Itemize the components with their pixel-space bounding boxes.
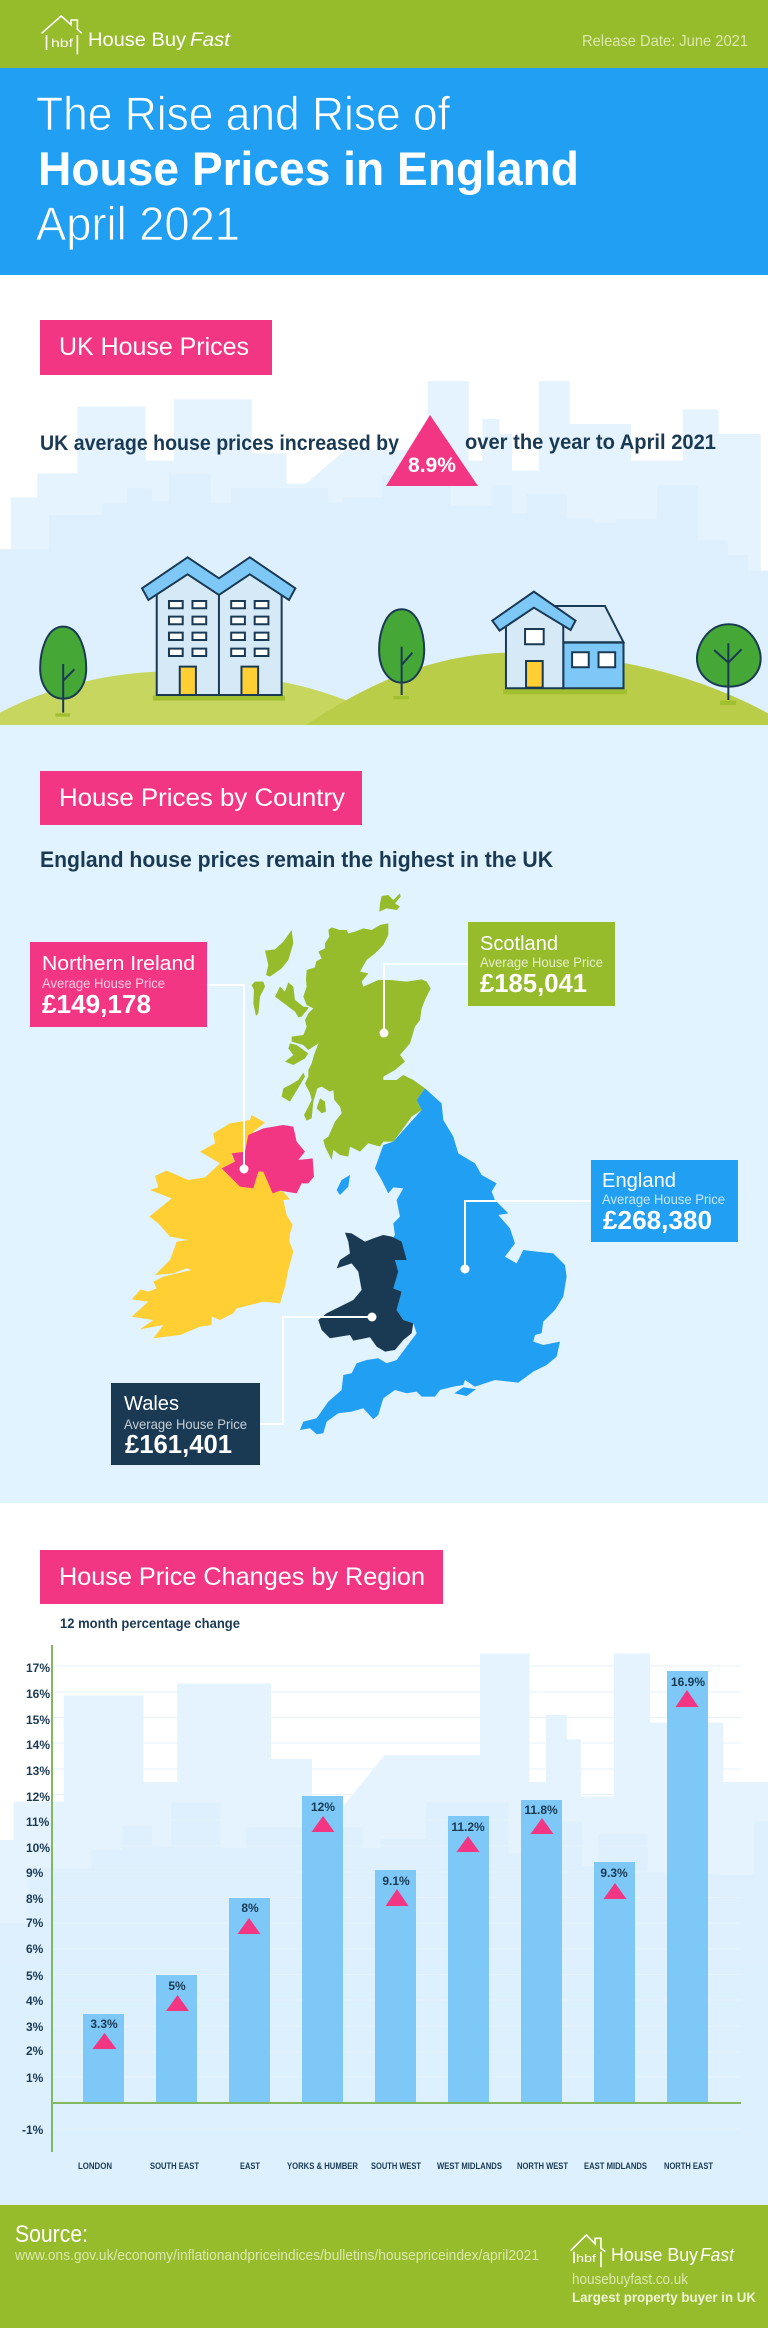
source	[14, 2221, 539, 2264]
y axis labels: 14%	[26, 1738, 50, 1752]
y axis labels: 17%	[26, 1661, 50, 1675]
y axis labels: 9%	[26, 1866, 44, 1880]
callout: Wales: Average House Price	[124, 1416, 247, 1432]
value labels: 8%	[241, 1901, 259, 1915]
callout: Wales: £161,401	[125, 1429, 232, 1459]
value labels: 5%	[168, 1979, 186, 1993]
region labels: SOUTH WEST	[371, 2161, 421, 2171]
panel: UK house prices	[0, 320, 768, 725]
logo: House Buy Fast: hbf	[51, 36, 74, 50]
value labels: 3.3%	[90, 2017, 118, 2031]
region labels: LONDON	[78, 2161, 112, 2171]
logo: House Buy Fast	[42, 16, 231, 54]
y axis labels: 8%	[26, 1892, 44, 1906]
callout: England	[591, 1160, 738, 1242]
value labels: 16.9%	[671, 1675, 705, 1689]
axes	[52, 1645, 741, 2152]
callout: Northern Ireland: Average House Price	[42, 975, 165, 991]
y axis labels: 2%	[26, 2044, 44, 2058]
callout: Scotland: Scotland	[480, 933, 558, 955]
footer logo: hbf	[576, 2253, 597, 2265]
footer logo: House Buy	[611, 2245, 698, 2265]
y axis labels: 10%	[26, 1841, 50, 1855]
logo: House Buy Fast: Fast	[190, 30, 231, 51]
value labels: 12%	[311, 1800, 335, 1814]
panel: house price changes by region	[0, 1550, 768, 2205]
top bar	[0, 0, 768, 68]
title	[36, 87, 579, 250]
heading	[40, 320, 272, 375]
heading	[40, 1550, 443, 1604]
callout: Northern Ireland: £149,178	[42, 989, 151, 1019]
grid lines	[52, 1666, 741, 2129]
heading: House Prices by Country	[59, 784, 346, 812]
heading: House Price Changes by Region	[59, 1563, 425, 1591]
callout: England: £268,380	[603, 1205, 712, 1235]
icon: triangle 8.9%: 8.9%	[408, 454, 456, 477]
statement: over the year to April 2021	[465, 431, 716, 454]
Scotland	[252, 893, 431, 1160]
region labels	[78, 2161, 713, 2171]
bar chart	[22, 1645, 741, 2171]
icon: tree left	[40, 627, 86, 717]
source: www.ons.gov.uk/economy/inflationandpriceindices/bulletins/housepriceindex/april2021	[14, 2248, 539, 2264]
region labels: EAST	[240, 2161, 260, 2171]
heading: UK House Prices	[59, 333, 249, 361]
y axis labels: -1%	[22, 2123, 44, 2137]
Wales	[318, 1233, 413, 1352]
icon: tree right	[697, 624, 761, 705]
region labels: SOUTH EAST	[150, 2161, 199, 2171]
hills	[0, 653, 768, 725]
footer logo	[571, 2235, 735, 2267]
bars	[83, 1671, 708, 2103]
callout: Scotland	[468, 922, 615, 1006]
y axis labels: 4%	[26, 1994, 44, 2008]
region labels: WEST MIDLANDS	[437, 2161, 502, 2171]
callout: England: England	[602, 1170, 676, 1192]
region labels: NORTH WEST	[517, 2161, 568, 2171]
callout: England: Average House Price	[602, 1191, 725, 1207]
y axis labels: 7%	[26, 1916, 44, 1930]
region labels: YORKS & HUMBER	[287, 2161, 358, 2171]
heading	[40, 771, 362, 825]
y axis labels	[22, 1661, 50, 2137]
axis title: 12 month percentage change	[60, 1616, 240, 1631]
logo: House Buy Fast: House Buy	[88, 30, 187, 51]
value labels: 11.8%	[524, 1803, 558, 1817]
callout: Northern Ireland	[30, 942, 207, 1027]
Ireland	[132, 1115, 293, 1338]
map	[132, 893, 567, 1434]
y axis labels: 5%	[26, 1969, 44, 1983]
tagline: Largest property buyer in UK	[572, 2289, 756, 2305]
callout: Scotland: £185,041	[480, 968, 587, 998]
callout: Scotland: Average House Price	[480, 954, 603, 970]
pink rise triangles	[92, 1690, 698, 2049]
icon: triangle 8.9%	[386, 415, 478, 486]
subheading: England house prices remain the highest in the UK	[40, 847, 553, 872]
Northern Ireland	[222, 1125, 314, 1193]
panel: house prices by country	[0, 725, 768, 1503]
value labels: 11.2%	[451, 1820, 485, 1834]
leader lines	[207, 964, 591, 1424]
title: April 2021	[36, 197, 240, 250]
website: housebuyfast.co.uk	[572, 2271, 688, 2288]
footer logo: Fast	[700, 2245, 735, 2265]
England	[300, 1088, 567, 1434]
y axis labels: 11%	[26, 1815, 50, 1829]
title: House Prices in England	[38, 142, 579, 195]
skyline backdrop	[0, 381, 768, 725]
value labels: 9.3%	[600, 1866, 628, 1880]
leader dots	[240, 1028, 470, 1322]
statement	[40, 415, 716, 486]
region labels: EAST MIDLANDS	[584, 2161, 647, 2171]
region labels: NORTH EAST	[664, 2161, 713, 2171]
footer	[0, 2205, 768, 2328]
source: Source:	[15, 2221, 88, 2248]
release date: Release Date: June 2021	[582, 33, 748, 50]
value labels: 9.1%	[382, 1874, 410, 1888]
callout: Northern Ireland: Northern Ireland	[42, 953, 195, 975]
title banner	[0, 68, 768, 275]
y axis labels: 15%	[26, 1713, 50, 1727]
callout: Wales: Wales	[124, 1393, 179, 1415]
y axis labels: 13%	[26, 1764, 50, 1778]
icon: apartment block	[142, 557, 295, 701]
y axis labels: 12%	[26, 1790, 50, 1804]
y axis labels: 16%	[26, 1687, 50, 1701]
icon: tree middle	[379, 609, 424, 699]
skyline backdrop	[0, 1654, 768, 2205]
value labels	[90, 1675, 705, 2031]
y axis labels: 6%	[26, 1942, 44, 1956]
title: The Rise and Rise of	[36, 87, 451, 140]
callout: Wales	[111, 1383, 260, 1465]
icon: house	[492, 592, 627, 694]
y axis labels: 3%	[26, 2020, 44, 2034]
y axis labels: 1%	[26, 2071, 44, 2085]
statement: UK average house prices increased by	[40, 432, 399, 455]
